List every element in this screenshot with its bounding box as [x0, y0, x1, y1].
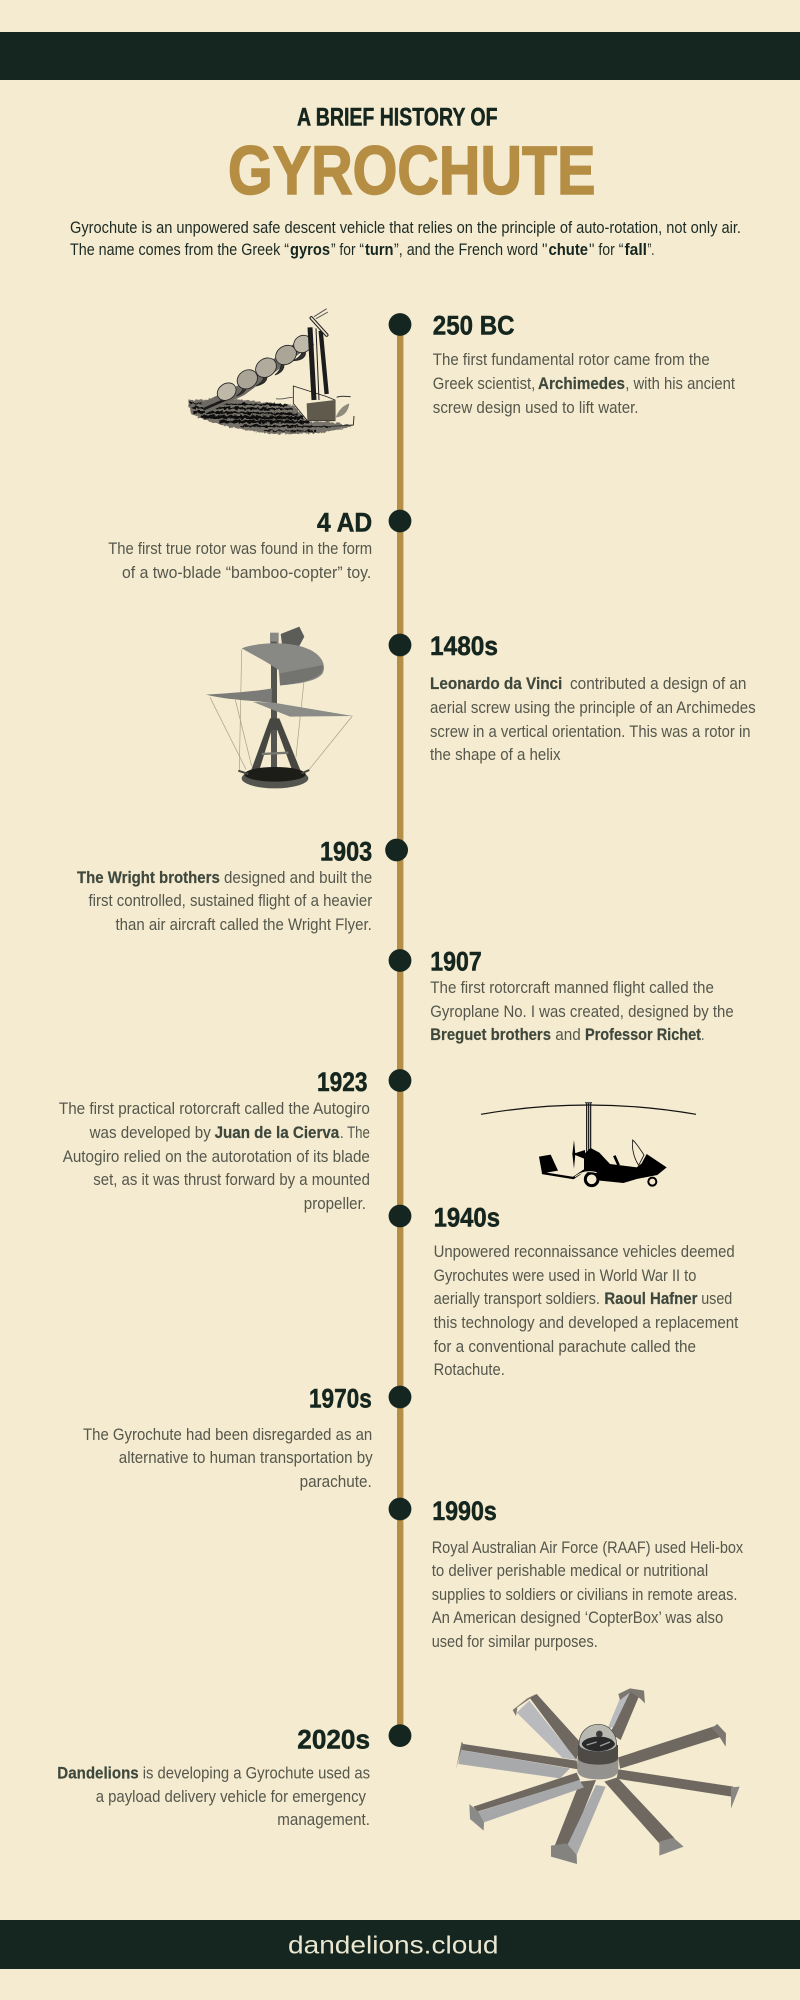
description: , with his ancient — [625, 375, 735, 393]
marker — [389, 1069, 411, 1092]
description: of a two-blade “bamboo-copter” toy. — [122, 564, 371, 582]
marker — [385, 839, 408, 861]
description: The first fundamental rotor came from the — [433, 351, 710, 369]
description: aerial screw using the principle of an Archimedes — [430, 699, 756, 717]
year: 1903 — [320, 836, 372, 866]
description: An American designed ‘CopterBox’ was also — [432, 1609, 723, 1627]
timeline entry: 1970s — [83, 1384, 411, 1491]
description: was developed by — [89, 1124, 211, 1142]
timeline entry: 1923 — [59, 1067, 411, 1213]
description: this technology and developed a replacement — [434, 1314, 739, 1332]
marker — [389, 1386, 411, 1408]
description: Leonardo da Vinci — [430, 675, 562, 693]
intro text: turn — [365, 241, 394, 259]
description: . The — [340, 1124, 370, 1142]
description: Greek scientist, — [433, 375, 535, 393]
description: Unpowered reconnaissance vehicles deemed — [434, 1243, 735, 1261]
timeline entry: 1990s — [389, 1496, 748, 1651]
year: 250 BC — [433, 311, 514, 341]
year: 1480s — [430, 631, 498, 661]
intro text: The name comes from the Greek “ — [70, 241, 289, 259]
description: The first practical rotorcraft called the Autogiro — [59, 1100, 370, 1118]
marker — [389, 510, 411, 532]
description: aerially transport soldiers. — [434, 1290, 600, 1308]
description: for a conventional parachute called the — [434, 1338, 696, 1356]
description: parachute. — [300, 1473, 372, 1491]
year: 4 AD — [317, 508, 372, 538]
intro text: fall — [624, 241, 647, 259]
description: the shape of a helix — [430, 746, 561, 764]
timeline entry: 4 AD — [108, 508, 411, 582]
image: da vinci aerial screw — [206, 627, 353, 788]
description: management. — [277, 1811, 370, 1829]
timeline entry: 1940s — [389, 1203, 743, 1379]
description: Gyrochutes were used in World War II to — [434, 1267, 696, 1285]
intro text: gyros — [290, 241, 330, 259]
intro text: ”. — [648, 241, 654, 259]
marker — [389, 1498, 411, 1520]
description: is developing a Gyrochute used as — [143, 1764, 370, 1782]
description: first controlled, sustained flight of a heavier — [88, 892, 373, 910]
description: Royal Australian Air Force (RAAF) used Heli-box — [432, 1539, 744, 1557]
timeline entry: 250 BC — [389, 311, 740, 417]
intro text: chute — [548, 241, 588, 259]
timeline line — [397, 324, 403, 1736]
description: designed and built the — [224, 869, 372, 887]
description: and — [555, 1026, 581, 1044]
description: alternative to human transportation by — [119, 1449, 373, 1467]
year: 1907 — [430, 947, 482, 977]
description: The first true rotor was found in the form — [108, 540, 372, 558]
intro text: '' for “ — [589, 241, 624, 259]
description: screw in a vertical orientation. This was a rotor in — [430, 723, 750, 741]
description: Juan de la Cierva — [215, 1124, 340, 1142]
description: to deliver perishable medical or nutritional — [432, 1562, 708, 1580]
description: used — [701, 1290, 732, 1308]
year: 1940s — [434, 1203, 500, 1233]
description: Breguet brothers — [430, 1026, 551, 1044]
marker — [389, 949, 411, 972]
description: than air aircraft called the Wright Flyer. — [116, 916, 372, 934]
image: dandelions gyrochute drone — [456, 1688, 740, 1864]
title: a brief history of: A BRIEF HISTORY OF — [297, 104, 498, 132]
description: set, as it was thrust forward by a mounted — [93, 1171, 370, 1189]
description: The Wright brothers — [77, 869, 220, 887]
intro text: ”, and the French word '' — [394, 241, 548, 259]
description: The first rotorcraft manned flight called the — [430, 979, 714, 997]
marker — [389, 313, 411, 336]
intro text: ” for “ — [331, 241, 364, 259]
timeline entry: 1903 — [77, 836, 408, 934]
description: Professor Richet — [585, 1026, 701, 1044]
description: . — [701, 1026, 704, 1044]
description: propeller. — [304, 1195, 366, 1213]
marker — [389, 1205, 411, 1227]
description: Rotachute. — [434, 1361, 505, 1379]
title: gyrochute: GYROCHUTE — [228, 132, 596, 209]
description: Raoul Hafner — [604, 1290, 698, 1308]
image: autogyro silhouette — [481, 1103, 696, 1186]
footer bar — [0, 1920, 800, 1969]
description: Dandelions — [57, 1764, 139, 1782]
title block — [228, 104, 596, 209]
timeline entry: 1907 — [389, 947, 738, 1044]
year: 1990s — [432, 1496, 497, 1526]
description: Autogiro relied on the autorotation of its blade — [63, 1148, 370, 1166]
marker — [389, 634, 411, 656]
description: The Gyrochute had been disregarded as an — [83, 1426, 372, 1444]
footer url: dandelions.cloud — [288, 1931, 498, 1959]
year: 1970s — [309, 1384, 372, 1414]
description: screw design used to lift water. — [433, 399, 638, 417]
year: 1923 — [317, 1067, 368, 1097]
description: Gyroplane No. I was created, designed by the — [430, 1003, 734, 1021]
marker — [389, 1724, 411, 1747]
description: used for similar purposes. — [432, 1633, 598, 1651]
description: Archimedes — [538, 375, 625, 393]
timeline entry: 1480s — [389, 631, 760, 764]
description: supplies to soldiers or civilians in remote areas. — [432, 1586, 738, 1604]
timeline entry: 2020s — [57, 1724, 411, 1829]
description: a payload delivery vehicle for emergency — [96, 1788, 367, 1806]
image: archimedes screw engraving — [188, 309, 354, 434]
year: 2020s — [297, 1724, 370, 1754]
header bar — [0, 32, 800, 80]
description: contributed a design of an — [570, 675, 746, 693]
